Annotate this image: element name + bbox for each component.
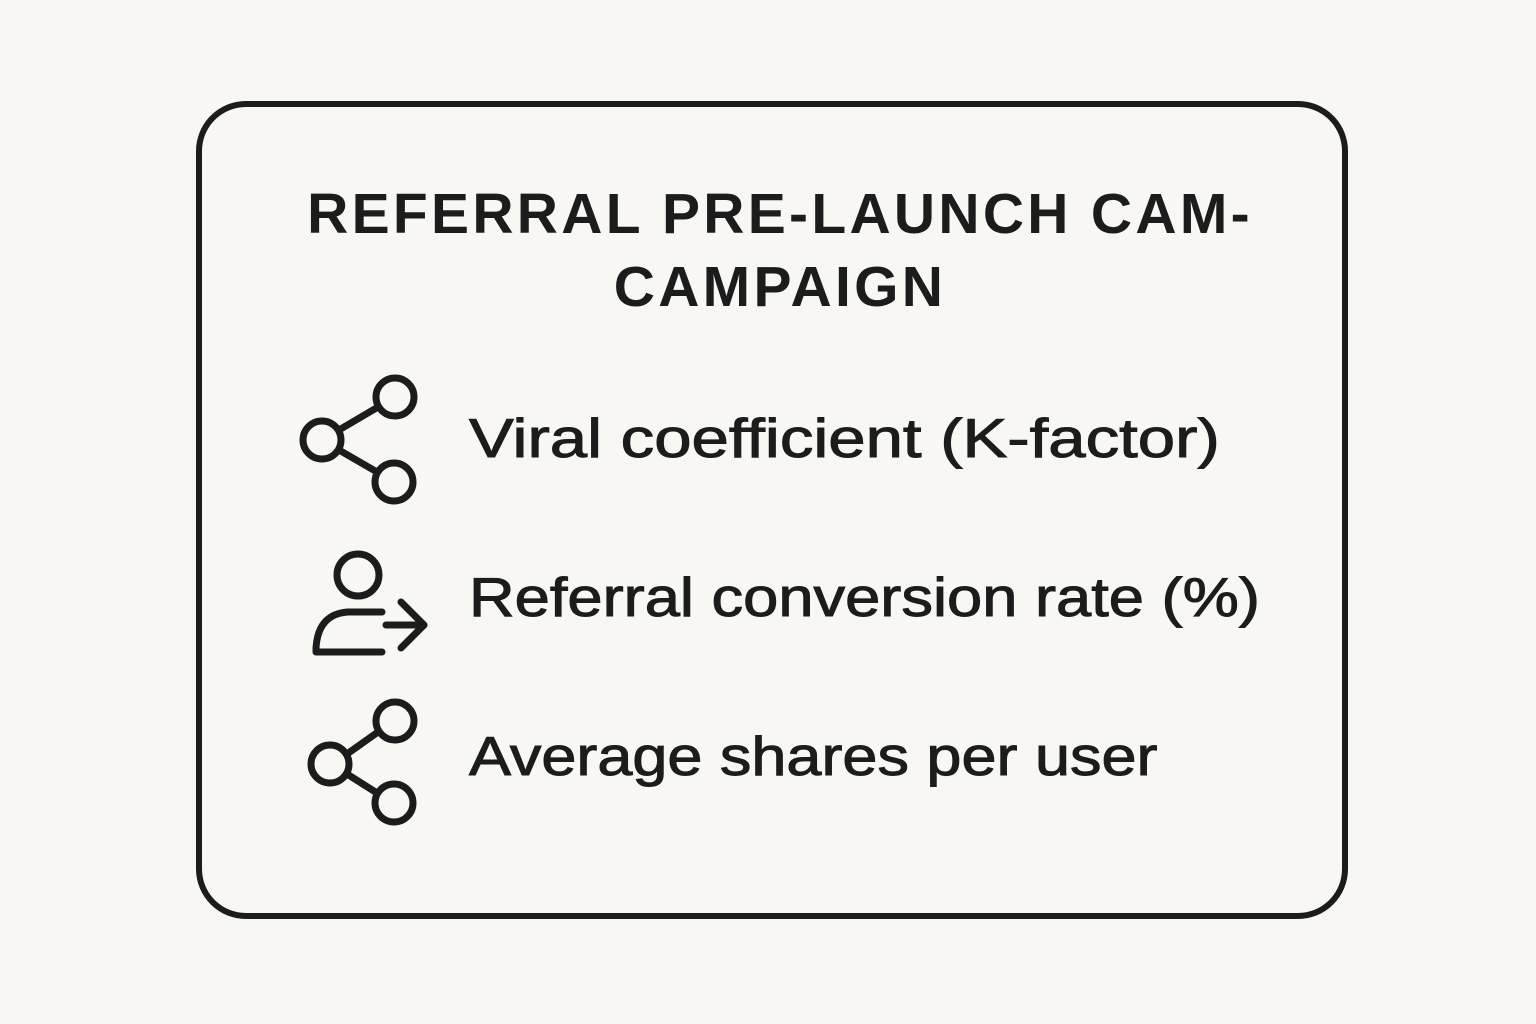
title: CAMPAIGN [614, 255, 946, 319]
text: viral coefficient: Viral coefficient (K-factor) [469, 407, 1220, 469]
icon: person with arrow [316, 554, 424, 652]
icon: share 1 [303, 378, 414, 501]
panel: main frame [196, 101, 1348, 919]
title [307, 182, 1253, 319]
icon: share 2 [311, 702, 414, 822]
title: REFERRAL PRE-LAUNCH CAM- [307, 182, 1253, 246]
text: average shares: Average shares per user [469, 725, 1157, 787]
text: referral conversion rate: Referral conversion rate (%) [469, 566, 1260, 628]
